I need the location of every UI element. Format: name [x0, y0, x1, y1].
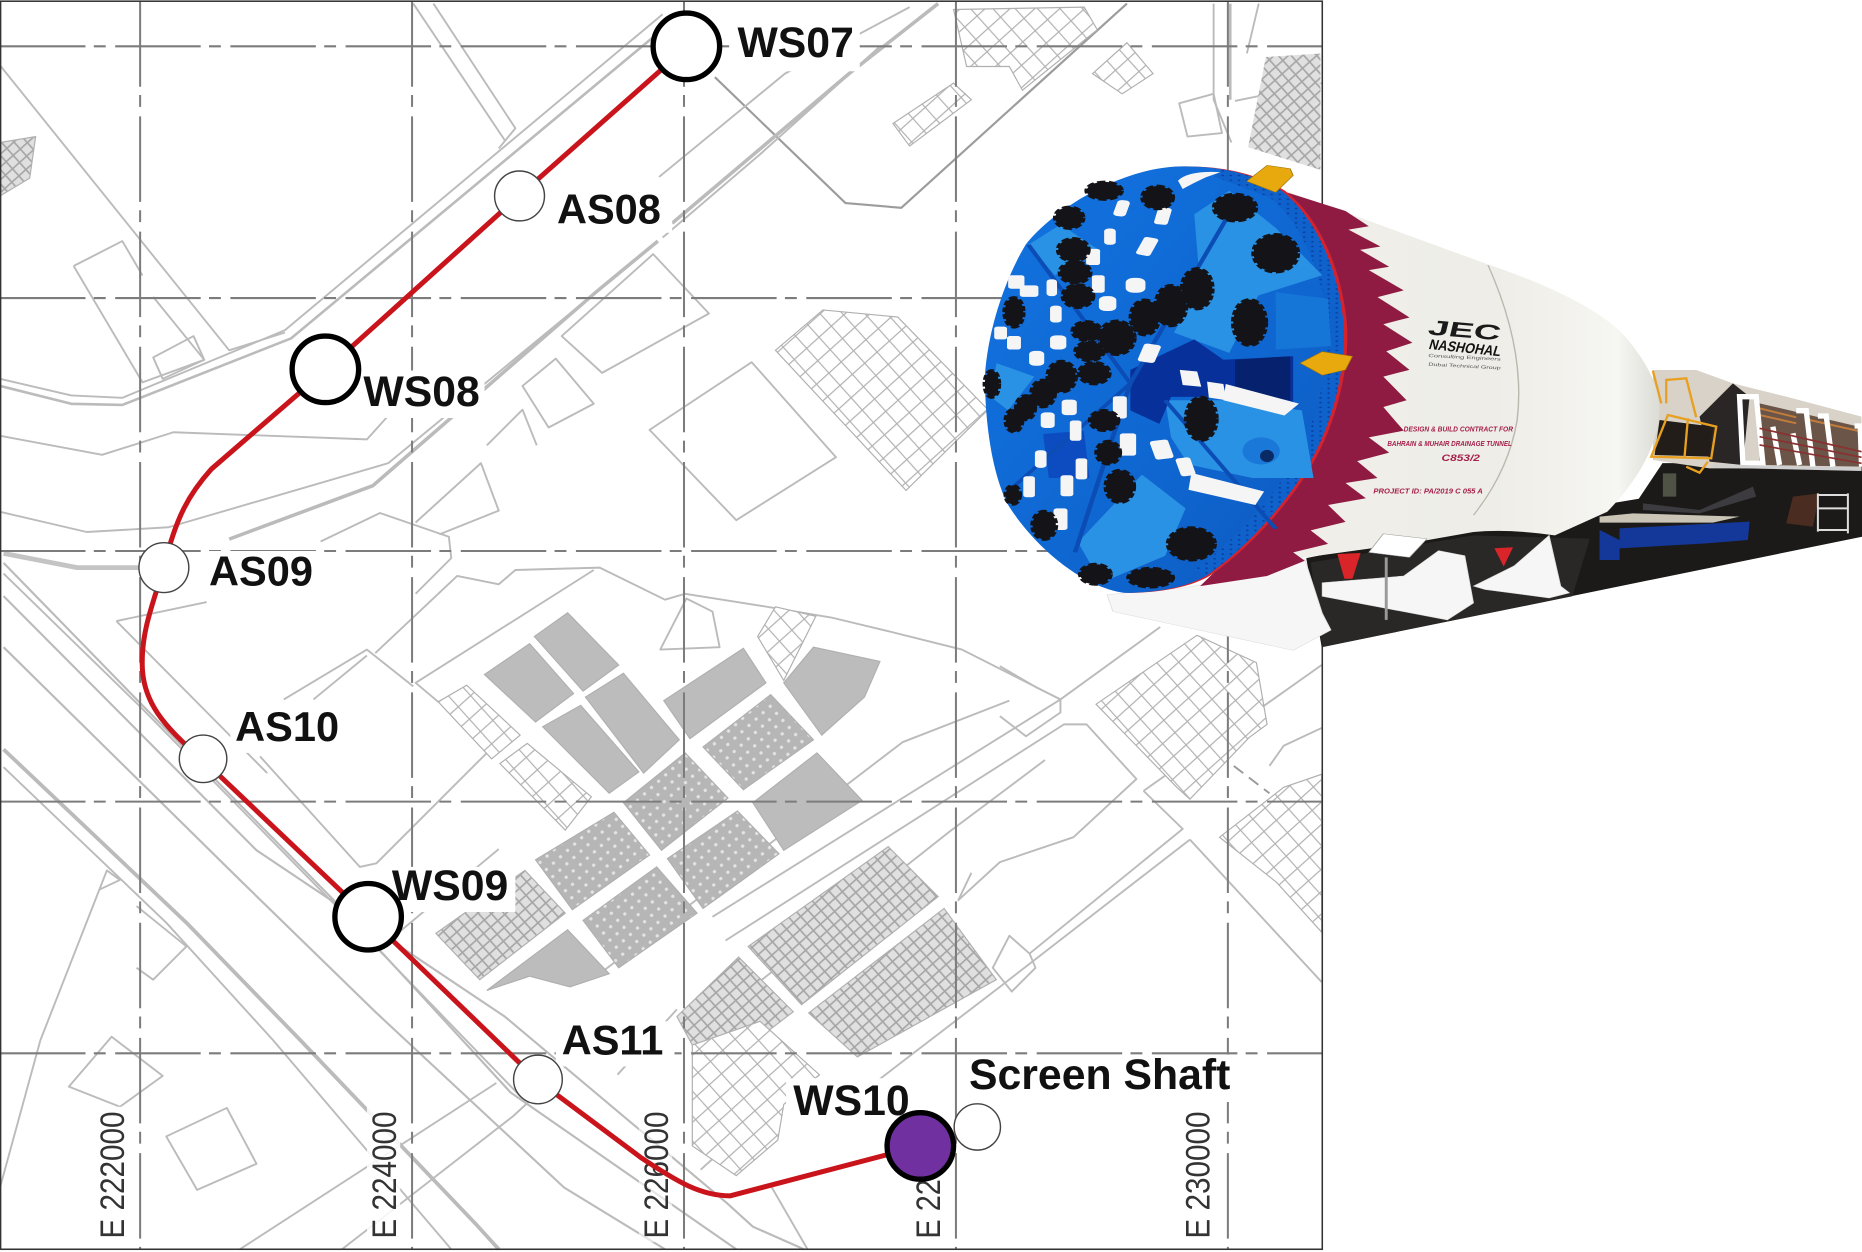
map frame: [1, 1, 1322, 1249]
black cutter discs: [985, 182, 1298, 587]
coordinate grid: [0, 1, 1322, 1249]
shaft marker: AS09: [139, 543, 313, 594]
radial spokes: [1008, 194, 1276, 552]
screen shaft marker: [954, 1051, 1230, 1150]
shaft marker: WS08: WS08: [363, 368, 480, 416]
TBM photo: BAHRAIN & MUHAIR DRAINAGE TUNNEL: [1387, 440, 1512, 448]
shaft marker: WS10: WS10: [793, 1077, 910, 1125]
dark openings: [1043, 339, 1293, 478]
shield lettering: [1373, 316, 1513, 496]
cutterhead: [985, 166, 1347, 593]
cradle supports: [1107, 534, 1569, 650]
TBM photo: [985, 165, 1862, 650]
easting labels: [94, 1107, 1217, 1242]
easting labels: E 226000: [638, 1112, 676, 1239]
light blue panels: [991, 191, 1331, 583]
yellow lifting lugs: [1247, 165, 1352, 375]
shaft marker: AS08: [495, 171, 661, 232]
shield body: [1241, 189, 1660, 559]
easting labels: E 230000: [1179, 1112, 1217, 1239]
easting labels: E 224000: [366, 1112, 404, 1239]
maroon serrated band: [1200, 191, 1412, 586]
label backgrounds: [204, 21, 1240, 1126]
shaft marker: WS09: [335, 862, 508, 950]
workshop floor: [1306, 463, 1862, 647]
easting labels: E 22: [910, 1179, 948, 1239]
shield lettering: NASHOHAL: [1427, 337, 1503, 360]
shield lettering: DESIGN & BUILD CONTRACT FOR: [1404, 426, 1513, 433]
shield lettering: C853/2: [1441, 453, 1480, 463]
shield lettering: Dubai Technical Group: [1428, 362, 1501, 371]
shaft marker: WS08: [292, 336, 480, 416]
shaft marker: WS07: WS07: [737, 19, 854, 67]
screen shaft marker: Screen Shaft: [969, 1051, 1230, 1099]
red lifting points: [1337, 547, 1513, 579]
backup gantry: [1600, 370, 1862, 560]
shaft marker: WS10: [793, 1077, 954, 1179]
shield lettering: PROJECT ID: PA/2019 C 055 A: [1373, 488, 1483, 496]
shaft marker: AS11: AS11: [562, 1017, 663, 1064]
shaft marker: AS11: [514, 1017, 663, 1104]
shaft marker: AS10: AS10: [235, 703, 339, 750]
white wear bars: [994, 172, 1299, 530]
map panel: [0, 1, 1322, 1249]
shield lettering: Consulting Engineers: [1428, 353, 1502, 362]
tunnel alignment route: [142, 48, 920, 1196]
housing blocks: [0, 7, 1322, 1176]
shield lettering: JEC: [1426, 316, 1503, 345]
shaft marker: AS09: AS09: [209, 547, 313, 594]
shaft marker: WS09: WS09: [392, 862, 508, 910]
easting labels: E 222000: [94, 1112, 132, 1239]
hub: [1243, 437, 1280, 464]
floor under shield: [1311, 535, 1590, 647]
shaft marker: WS07: [653, 13, 854, 80]
road network: [0, 4, 1322, 1249]
shaft marker: AS08: AS08: [557, 185, 661, 232]
shaft marker: AS10: [179, 703, 339, 783]
